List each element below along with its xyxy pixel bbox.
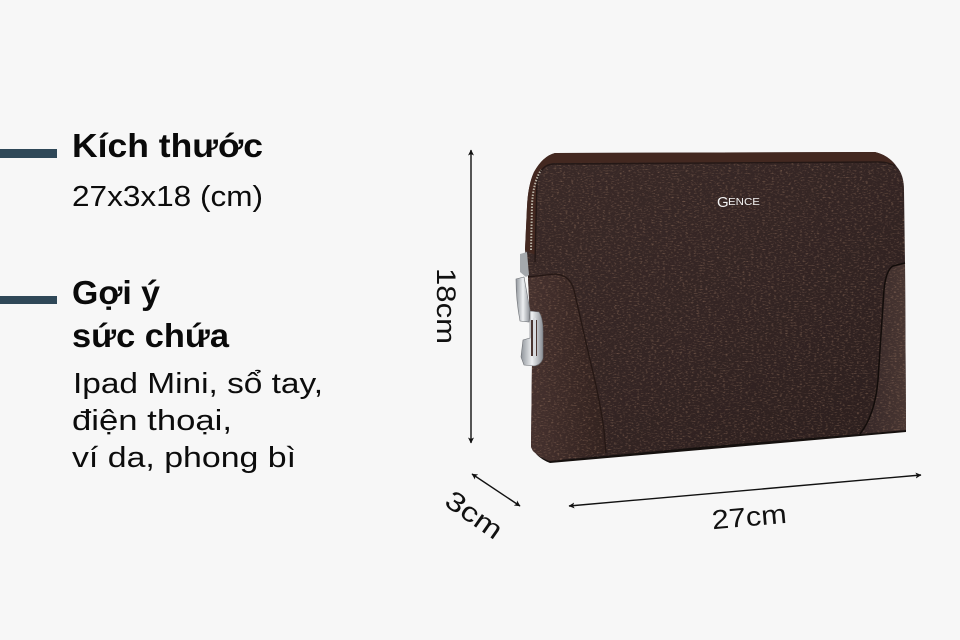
left gusset xyxy=(528,274,606,461)
panel seam under zipper xyxy=(535,162,895,262)
label: 3cm: 3cm xyxy=(440,485,508,545)
brand logo: ENCE xyxy=(728,197,760,208)
text: dimensions value: 27x3x18 (cm) xyxy=(72,181,263,213)
right gusset xyxy=(860,263,906,434)
text: capacity list: ví da, phong bì xyxy=(72,442,296,474)
heading: Gợi ý sức chứa: sức chứa xyxy=(72,317,230,354)
arrow: depth xyxy=(472,474,520,506)
bag shadow xyxy=(536,429,906,463)
accent bar: dimensions xyxy=(0,149,57,158)
label: 18cm: 18cm xyxy=(431,268,461,344)
left gusset seam xyxy=(528,274,606,453)
text: capacity list: điện thoại, xyxy=(72,405,232,437)
product: leather bag xyxy=(516,150,910,465)
heading: Gợi ý sức chứa: Gợi ý xyxy=(72,274,161,311)
arrow: width xyxy=(569,475,921,506)
accent bar: capacity xyxy=(0,296,57,304)
heading: Kích thước: Kích thước xyxy=(72,127,263,164)
bag body xyxy=(525,152,906,461)
leather texture xyxy=(520,150,910,465)
text: capacity list: Ipad Mini, sổ tay, xyxy=(73,368,323,400)
arrow: height xyxy=(470,150,472,443)
zipper pull hardware xyxy=(516,252,543,366)
right gusset edge xyxy=(860,263,905,434)
heading: Gợi ý sức chứa xyxy=(72,274,230,354)
top zipper band xyxy=(525,152,895,255)
brand logo xyxy=(717,194,760,211)
label: 27cm: 27cm xyxy=(711,499,788,535)
zipper teeth xyxy=(531,170,541,250)
text: capacity list xyxy=(72,368,323,474)
brand logo: G xyxy=(717,194,729,211)
